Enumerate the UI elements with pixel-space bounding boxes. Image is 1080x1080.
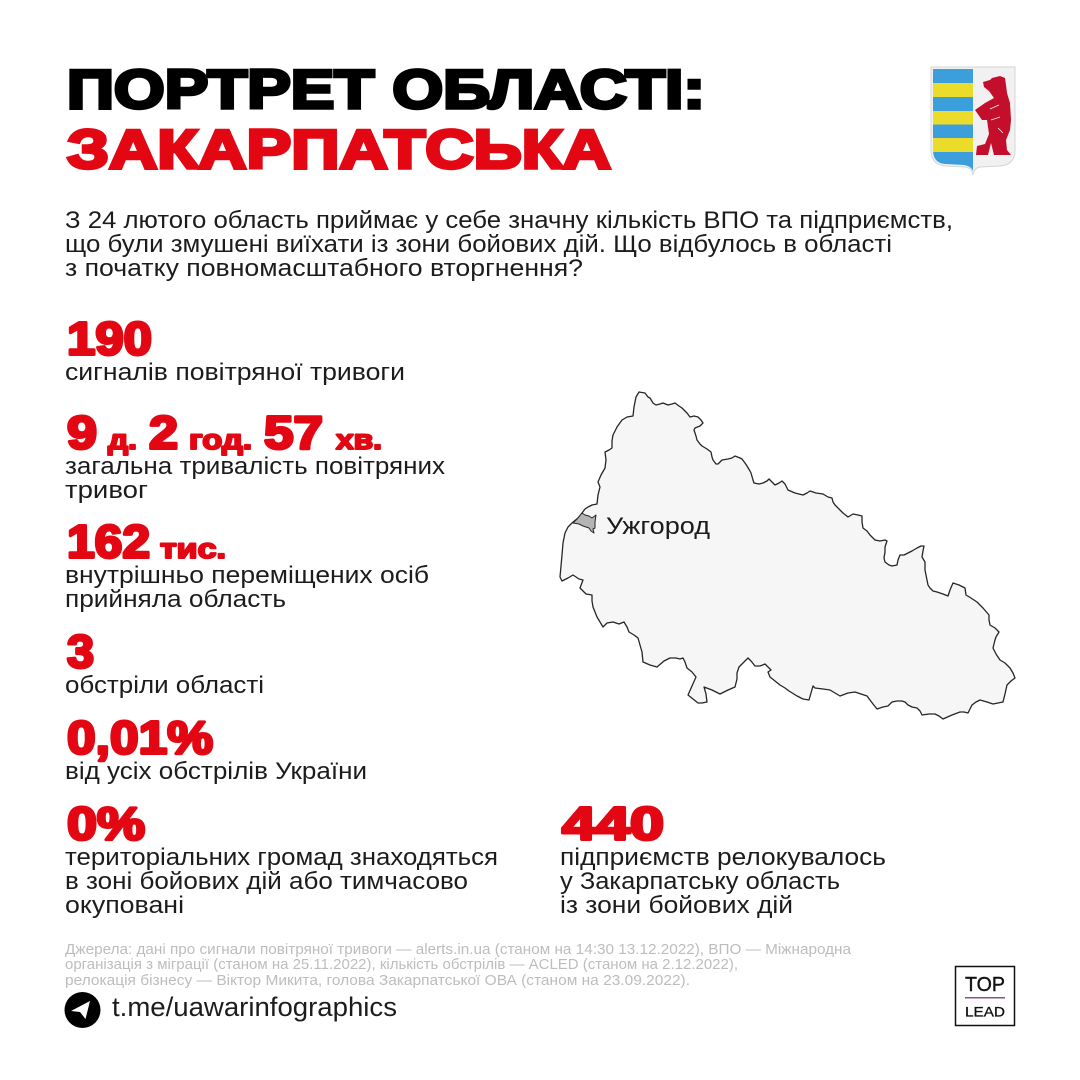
intro text: що були змушені виїхати із зони бойових дій. Що відбулось в області [65, 231, 892, 258]
title: ПОРТРЕТ ОБЛАСТІ: [67, 58, 705, 120]
sources: організація з міграції (станом на 25.11.2022), кількість обстрілів — ACLED (станом на 2.12.2022), [65, 956, 738, 973]
stat: share of shellings [65, 712, 367, 785]
sources [65, 941, 852, 989]
logo: Top Lead [956, 966, 1014, 1026]
stat: relocated businesses: підприємств релокувалось [560, 844, 886, 871]
stat: share of shellings: 0,01% [67, 712, 213, 764]
sources: релокація бізнесу — Віктор Микита, голова Закарпатської ОВА (станом на 23.09.2022). [65, 972, 690, 989]
sources: Джерела: дані про сигнали повітряної тривоги — alerts.in.ua (станом на 14:30 13.12.2022), ВПО — Міжнародна [65, 941, 852, 958]
intro text [65, 207, 953, 282]
icon: telegram [64, 992, 100, 1028]
stat: communities in combat zone: 0% [67, 798, 145, 850]
stat: total alert duration: хв. [336, 424, 382, 455]
map of Zakarpattia oblast [560, 392, 1015, 719]
stat: internally displaced persons [65, 516, 429, 613]
region outline [560, 392, 1015, 719]
stat: relocated businesses: 440 [562, 798, 664, 850]
intro text: З 24 лютого область приймає у себе значну кількість ВПО та підприємств, [65, 207, 953, 234]
stat: internally displaced persons: внутрішньо переміщених осіб [65, 562, 429, 589]
stat: shellings: обстріли області [65, 672, 264, 699]
icon: coat of arms of Zakarpattia [931, 67, 1015, 175]
title [67, 58, 705, 180]
city label: Ужгород [606, 513, 710, 540]
stat: relocated businesses: у Закарпатську область [560, 868, 840, 895]
stat: internally displaced persons: 162 [67, 516, 150, 568]
logo: Top Lead: TOP [965, 974, 1005, 996]
stat: share of shellings: від усіх обстрілів України [65, 758, 367, 785]
telegram link: t.me/uawarinfographics [112, 992, 397, 1022]
title: ЗАКАРПАТСЬКА [67, 118, 611, 180]
stat: communities in combat zone: в зоні бойових дій або тимчасово [65, 868, 468, 895]
stat: air raid signals: 190 [67, 312, 152, 364]
stat: total alert duration: 9 [67, 406, 97, 458]
stat: shellings [65, 626, 264, 699]
stat: total alert duration: год. [189, 424, 252, 455]
stat: communities in combat zone [65, 798, 498, 919]
stat: relocated businesses: із зони бойових дій [560, 892, 793, 919]
stat: total alert duration: загальна тривалість повітряних [65, 453, 445, 480]
stat: total alert duration: 2 [149, 406, 178, 458]
stat: total alert duration: 57 [264, 406, 323, 458]
stat: communities in combat zone: територіальних громад знаходяться [65, 844, 498, 871]
stat: total alert duration: тривог [65, 477, 148, 504]
stat: total alert duration [65, 406, 445, 504]
city: Uzhhorod area [573, 513, 596, 533]
stat: communities in combat zone: окуповані [65, 892, 184, 919]
stat: internally displaced persons: прийняла область [65, 586, 286, 613]
stat: air raid signals [65, 312, 405, 386]
stat: total alert duration: д. [108, 424, 137, 455]
logo: Top Lead: LEAD [965, 1004, 1005, 1020]
intro text: з початку повномасштабного вторгнення? [65, 255, 583, 282]
stat: relocated businesses [560, 798, 886, 919]
stat: internally displaced persons: тис. [160, 533, 226, 564]
stat: air raid signals: сигналів повітряної тривоги [65, 359, 405, 386]
stat: shellings: 3 [67, 626, 94, 678]
